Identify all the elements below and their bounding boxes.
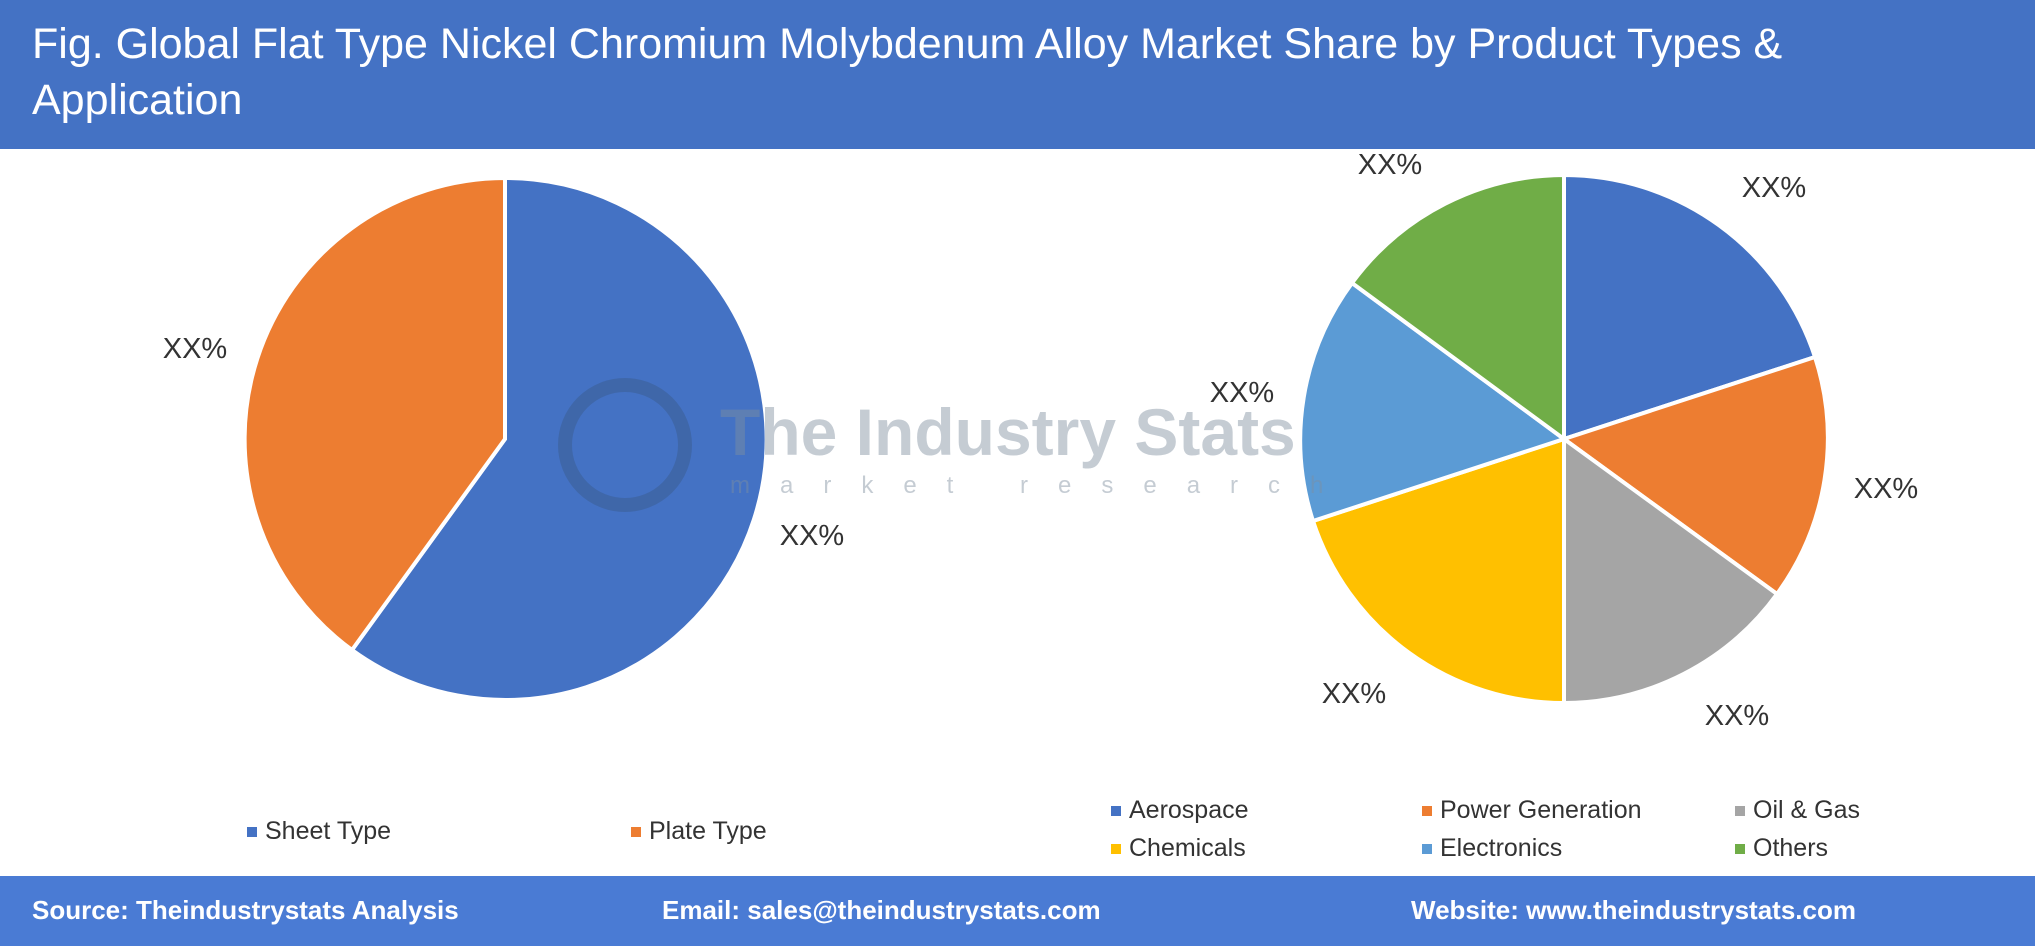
header <box>0 0 2035 149</box>
data labels: XX% <box>1742 172 1806 204</box>
legend right: Oil & Gas <box>1753 796 1860 824</box>
watermark: market research <box>730 472 1353 499</box>
data labels: XX% <box>163 333 227 365</box>
footer <box>0 876 2035 946</box>
legend right: Electronics <box>1440 834 1562 862</box>
right pie <box>1300 175 1828 703</box>
data labels: XX% <box>1358 149 1422 181</box>
legend right <box>1111 796 1860 862</box>
left pie <box>245 178 767 700</box>
data labels: XX% <box>780 520 844 552</box>
data labels: XX% <box>1210 377 1274 409</box>
legend left: Sheet Type <box>265 817 391 845</box>
data labels: XX% <box>1854 473 1918 505</box>
data labels: XX% <box>1705 700 1769 732</box>
legend right: Power Generation <box>1440 796 1642 824</box>
legend right: Aerospace <box>1129 796 1249 824</box>
data labels: XX% <box>1322 678 1386 710</box>
footer: Email: sales@theindustrystats.com <box>662 895 1101 925</box>
watermark: The Industry Stats <box>720 395 1296 469</box>
legend right: Others <box>1753 834 1828 862</box>
legend right: Chemicals <box>1129 834 1246 862</box>
title: Fig. Global Flat Type Nickel Chromium Molybdenum Alloy Market Share by Product Types & Application <box>32 20 1782 124</box>
text: Plate Type <box>649 817 767 845</box>
footer: Website: www.theindustrystats.com <box>1411 895 1856 925</box>
footer: Source: Theindustrystats Analysis <box>32 895 459 925</box>
watermark <box>565 385 1353 505</box>
data labels <box>163 149 1918 732</box>
